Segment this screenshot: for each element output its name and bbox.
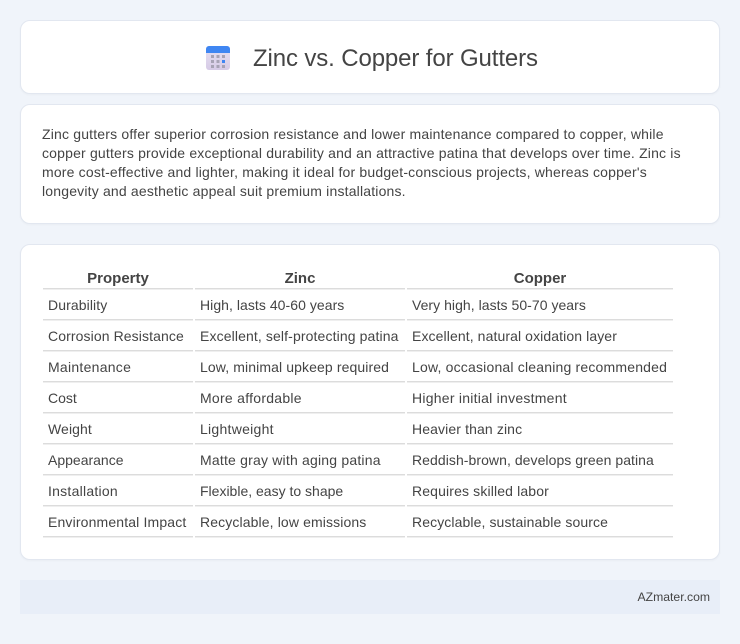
panel: summary — [20, 104, 720, 224]
row: corrosion resistance — [48, 328, 617, 344]
table header: Zinc — [285, 270, 315, 287]
row: corrosion resistance: Excellent, natural oxidation layer — [412, 328, 617, 344]
row: maintenance — [48, 359, 667, 375]
row: appearance: Matte gray with aging patina — [200, 452, 381, 468]
row: appearance — [48, 452, 654, 468]
row: durability — [48, 297, 586, 313]
table header: Copper — [514, 270, 566, 287]
icon: calendar — [206, 46, 230, 70]
footer credit: AZmater.com — [638, 590, 710, 604]
footer bar — [20, 580, 720, 614]
row: corrosion resistance: Excellent, self-protecting patina — [200, 328, 399, 344]
row: appearance: Appearance — [48, 452, 124, 468]
panel: comparison table — [20, 244, 720, 560]
row: environmental impact — [48, 514, 608, 530]
row: durability: High, lasts 40-60 years — [200, 297, 344, 313]
row: corrosion resistance: Corrosion Resistance — [48, 328, 184, 344]
summary text — [42, 126, 681, 199]
title: Zinc vs. Copper for Gutters — [253, 45, 538, 72]
row: weight: Lightweight — [200, 421, 274, 437]
summary text: Zinc gutters offer superior corrosion resistance and lower maintenance compared to copper, while — [42, 126, 664, 142]
row: installation: Flexible, easy to shape — [200, 483, 343, 499]
row: appearance: Reddish-brown, develops green patina — [412, 452, 654, 468]
row: weight — [48, 421, 522, 437]
row: weight: Heavier than zinc — [412, 421, 522, 437]
row: cost: Cost — [48, 390, 77, 406]
row: cost: More affordable — [200, 390, 302, 406]
summary text: longevity and aesthetic appeal suit premium installations. — [42, 183, 406, 199]
row: durability: Durability — [48, 297, 107, 313]
table header: Property — [87, 270, 149, 287]
row: cost — [48, 390, 567, 406]
row: installation — [48, 483, 549, 499]
table header — [87, 270, 566, 287]
summary text: more cost-effective and lighter, making it ideal for budget-conscious projects, whereas copper's — [42, 164, 647, 180]
row: installation: Requires skilled labor — [412, 483, 549, 499]
row: maintenance: Low, occasional cleaning recommended — [412, 359, 667, 375]
panel: title header — [20, 20, 720, 94]
row: environmental impact: Recyclable, sustainable source — [412, 514, 608, 530]
row: environmental impact: Environmental Impact — [48, 514, 186, 530]
row: installation: Installation — [48, 483, 118, 499]
row: maintenance: Maintenance — [48, 359, 131, 375]
summary text: copper gutters provide exceptional durability and an attractive patina that develops over time. Zinc is — [42, 145, 681, 161]
row: maintenance: Low, minimal upkeep required — [200, 359, 389, 375]
row: cost: Higher initial investment — [412, 390, 567, 406]
row: weight: Weight — [48, 421, 92, 437]
row: environmental impact: Recyclable, low emissions — [200, 514, 366, 530]
row: durability: Very high, lasts 50-70 years — [412, 297, 586, 313]
